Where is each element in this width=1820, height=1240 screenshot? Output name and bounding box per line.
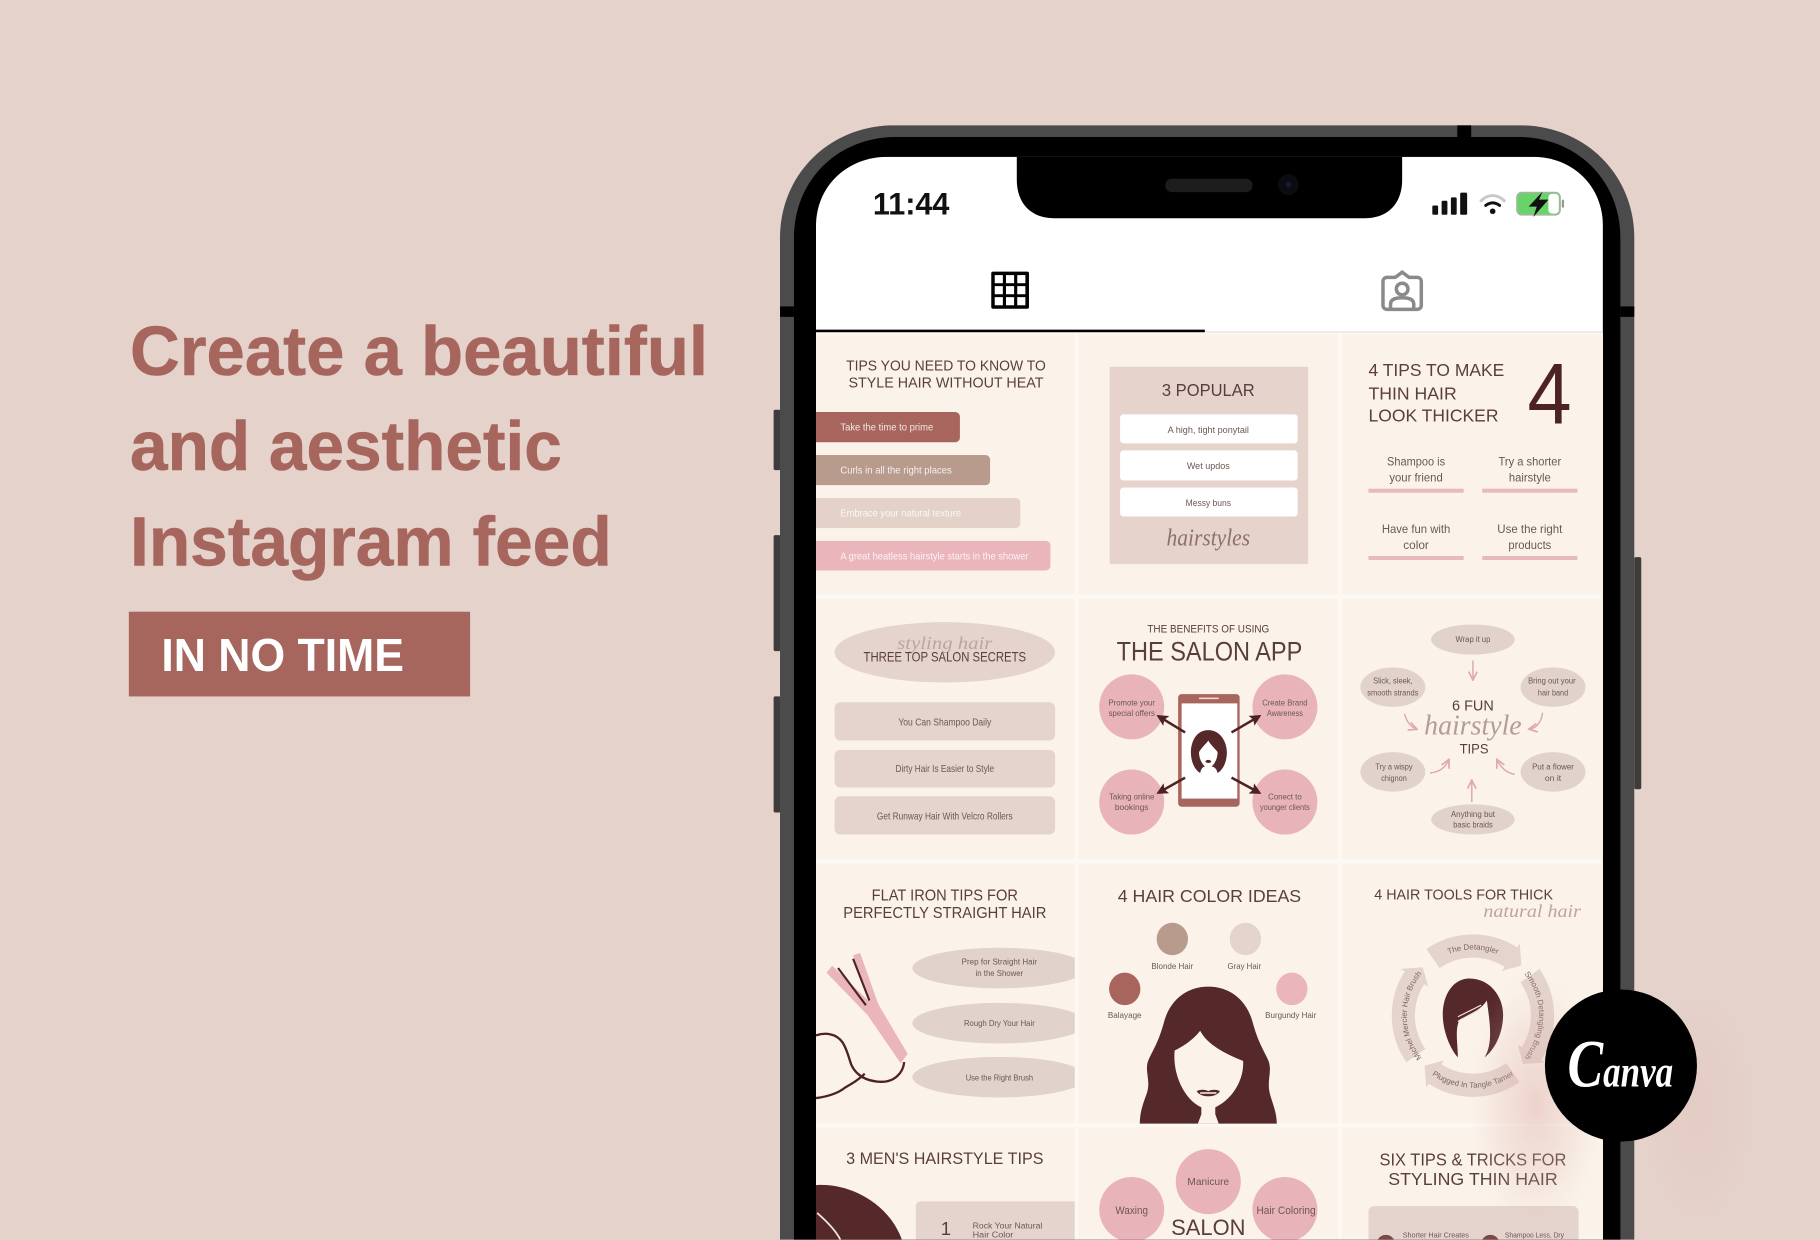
post: 4 tips thin hair: 4 <box>1527 347 1572 443</box>
post: 6 fun hairstyle tips: chignon <box>1381 774 1407 783</box>
post: flat iron tips <box>816 888 1086 1098</box>
post: 3 popular hairstyles: hairstyles <box>1167 525 1250 552</box>
post: 4 tips thin hair: Try a shorter <box>1498 454 1561 468</box>
post: three top salon secrets: THREE TOP SALON SECRETS <box>864 649 1026 665</box>
post: the salon app <box>1099 624 1317 835</box>
post: 4 tips thin hair: your friend <box>1389 471 1443 485</box>
post: 6 fun hairstyle tips: TIPS <box>1460 740 1489 756</box>
post: 6 fun hairstyle tips: Put a flower <box>1532 763 1574 772</box>
phone <box>774 125 1642 1240</box>
post: tips without heat: A great heatless hairstyle starts in the shower <box>840 551 1029 562</box>
post: salon services <box>1099 1149 1317 1240</box>
post: 3 men's hairstyle tips: 3 MEN'S HAIRSTYLE TIPS <box>846 1149 1043 1168</box>
post: three top salon secrets: styling hair <box>897 633 993 653</box>
post: 4 tips thin hair: Have fun with <box>1382 522 1450 536</box>
post: 6 fun hairstyle tips: Slick, sleek, <box>1373 677 1413 686</box>
post: 6 fun hairstyle tips <box>1360 624 1586 835</box>
post: 4 hair tools <box>1374 890 1581 1097</box>
side buttons <box>774 410 1641 813</box>
post: six tips and tricks: SIX TIPS & TRICKS FOR <box>1380 1149 1566 1169</box>
ring diagram <box>1392 934 1554 1097</box>
arrows <box>1158 716 1259 793</box>
post: 3 men's hairstyle tips: 1 <box>941 1218 951 1239</box>
post: flat iron tips: PERFECTLY STRAIGHT HAIR <box>843 905 1046 922</box>
post: six tips and tricks <box>1368 1149 1579 1240</box>
post: flat iron tips: FLAT IRON TIPS FOR <box>872 888 1018 905</box>
post: three top salon secrets: You Can Shampoo Daily <box>898 717 991 728</box>
post: 3 men's hairstyle tips: Hair Color <box>973 1230 1014 1239</box>
post: flat iron tips: Rough Dry Your Hair <box>964 1018 1035 1028</box>
post: the salon app: special offers <box>1108 708 1156 718</box>
post: salon services: Waxing <box>1115 1205 1148 1217</box>
badge: in no time: IN NO TIME <box>161 629 404 681</box>
post: the salon app: Create Brand <box>1262 698 1308 708</box>
post: 4 tips thin hair: Shampoo is <box>1387 454 1445 468</box>
post: 3 men's hairstyle tips: Rock Your Natural <box>973 1221 1042 1231</box>
screen <box>816 156 1603 1240</box>
post: the salon app: Promote your <box>1108 698 1155 708</box>
icon: wifi <box>1481 196 1504 214</box>
post: salon services: Manicure <box>1187 1177 1229 1188</box>
post: 4 hair tools: 4 HAIR TOOLS FOR THICK <box>1374 887 1553 904</box>
post: tips without heat: Embrace your natural texture <box>840 509 962 520</box>
post: flat iron tips: Use the Right Brush <box>966 1073 1033 1083</box>
post: the salon app: THE SALON APP <box>1117 636 1302 666</box>
icon: smartphone with face <box>1178 694 1240 807</box>
post: tips without heat <box>816 357 1050 570</box>
post: 4 tips thin hair: THIN HAIR <box>1368 383 1457 403</box>
post: the salon app: Awareness <box>1267 708 1303 718</box>
post: 6 fun hairstyle tips: Anything but <box>1451 810 1496 819</box>
tab underline <box>816 330 1603 333</box>
post: the salon app: THE BENEFITS OF USING <box>1147 624 1269 636</box>
post: 4 hair tools: natural hair <box>1483 901 1581 921</box>
icon: flat iron <box>816 953 908 1098</box>
post: 4 tips thin hair: LOOK THICKER <box>1368 405 1498 425</box>
post: six tips and tricks: STYLING THIN HAIR <box>1388 1169 1558 1189</box>
notch <box>1017 157 1402 218</box>
post: 4 tips thin hair: hairstyle <box>1509 471 1551 485</box>
canva shadow <box>1468 969 1762 1240</box>
icon: tagged tab <box>1383 272 1421 309</box>
illustration: woman with long hair <box>1140 987 1277 1124</box>
status bar <box>874 192 1564 217</box>
post: 3 popular hairstyles <box>1110 367 1308 564</box>
post: 4 hair color ideas: Balayage <box>1108 1010 1142 1020</box>
icon: signal <box>1432 193 1467 215</box>
post: tips without heat: Curls in all the right places <box>840 466 952 477</box>
post: 6 fun hairstyle tips: basic braids <box>1453 821 1493 830</box>
icon: bob hairstyle <box>1443 978 1503 1057</box>
canva badge: Canva <box>1568 1026 1673 1101</box>
post: flat iron tips: Prep for Straight Hair <box>962 957 1037 967</box>
badge: in no time <box>129 612 470 696</box>
arrows <box>1404 660 1543 802</box>
phone frame <box>780 125 1634 1240</box>
post: 6 fun hairstyle tips: smooth strands <box>1367 688 1418 697</box>
post: 4 hair color ideas: Gray Hair <box>1227 961 1261 971</box>
icon: battery <box>1517 192 1564 217</box>
post: the salon app: bookings <box>1115 802 1149 812</box>
post: the salon app: Conect to <box>1268 792 1302 802</box>
post: 6 fun hairstyle tips: Wrap it up <box>1456 635 1491 644</box>
ring diagram: Michel Mercier Hair Brush <box>1401 972 1422 1060</box>
post: tips without heat: Take the time to prime <box>840 423 934 434</box>
post: three top salon secrets: Get Runway Hair With Velcro Rollers <box>877 811 1013 822</box>
post: 6 fun hairstyle tips: on it <box>1545 774 1562 783</box>
post: 3 popular hairstyles: Wet updos <box>1187 461 1230 471</box>
post: 4 hair color ideas <box>1108 886 1316 1124</box>
post: the salon app: Taking online <box>1109 792 1154 802</box>
speaker and camera <box>1165 174 1299 195</box>
post: flat iron tips: in the Shower <box>976 968 1023 978</box>
canva badge <box>1545 990 1697 1142</box>
post: six tips and tricks: Shampoo Less, Dry <box>1505 1230 1564 1239</box>
post: 3 popular hairstyles: 3 POPULAR <box>1162 380 1255 400</box>
post: 4 tips thin hair: products <box>1508 538 1551 552</box>
post: 3 popular hairstyles: A high, tight ponytail <box>1168 425 1249 435</box>
post: 4 hair color ideas: Burgundy Hair <box>1265 1010 1316 1020</box>
post: three top salon secrets <box>835 622 1055 835</box>
post: 4 tips thin hair: 4 TIPS TO MAKE <box>1368 360 1504 380</box>
post: the salon app: younger clients <box>1260 802 1310 812</box>
post: tips without heat: TIPS YOU NEED TO KNOW TO <box>846 357 1046 374</box>
post: 3 men's hairstyle tips <box>816 1149 1075 1240</box>
post: 6 fun hairstyle tips: hairstyle <box>1424 710 1522 742</box>
feed grid <box>816 333 1603 1240</box>
ring diagram: Plugged In Tangle Tamer <box>1432 1070 1513 1089</box>
post: 4 hair color ideas: Blonde Hair <box>1151 961 1193 971</box>
post: 4 tips thin hair <box>1368 347 1577 560</box>
post: six tips and tricks: Shorter Hair Creates <box>1403 1230 1469 1239</box>
icon: grid tab <box>991 272 1029 309</box>
post: 6 fun hairstyle tips: 6 FUN <box>1452 697 1494 714</box>
headline: Create a beautiful <box>130 312 708 390</box>
ring diagram: Smooth Detangling Brush <box>1524 972 1544 1060</box>
ring diagram: The Detangler <box>1446 944 1499 954</box>
post: three top salon secrets: Dirty Hair Is Easier to Style <box>895 764 995 775</box>
headline: and aesthetic <box>130 407 562 485</box>
post: 4 tips thin hair: color <box>1403 538 1429 552</box>
headline: Instagram feed <box>130 502 612 580</box>
post: 4 tips thin hair: Use the right <box>1497 522 1563 536</box>
post: tips without heat: STYLE HAIR WITHOUT HEAT <box>848 375 1043 392</box>
clock: 11:44 <box>873 187 950 222</box>
post: 6 fun hairstyle tips: Bring out your <box>1528 677 1576 686</box>
post: 6 fun hairstyle tips: Try a wispy <box>1375 763 1413 772</box>
post: 3 popular hairstyles: Messy buns <box>1186 498 1231 508</box>
post: 6 fun hairstyle tips: hair band <box>1538 688 1568 697</box>
post: salon services: Hair Coloring <box>1256 1205 1316 1217</box>
post: 4 hair color ideas: 4 HAIR COLOR IDEAS <box>1118 886 1301 906</box>
post: salon services: SALON <box>1171 1215 1245 1240</box>
headline <box>130 312 708 580</box>
